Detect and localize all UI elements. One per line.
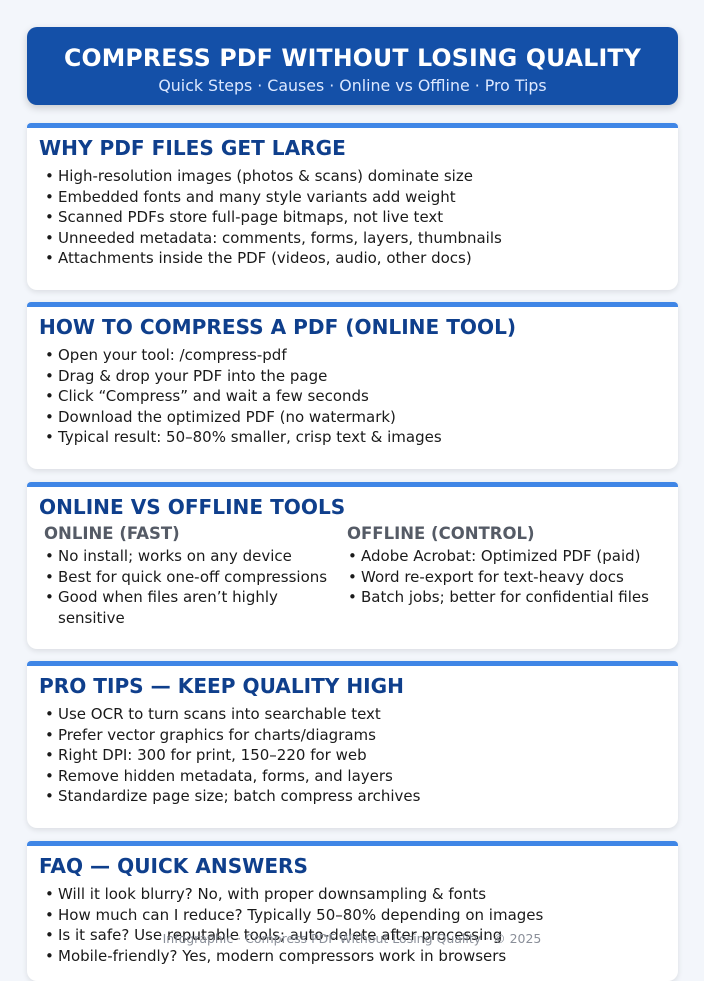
bullet list: Typical result: 50–80% smaller, crisp text & images: [58, 428, 442, 446]
bullet list: Download the optimized PDF (no watermark): [58, 408, 396, 426]
column: offline: Batch jobs; better for confidential files: [361, 588, 649, 606]
panel: faq: [27, 841, 678, 981]
column: online: No install; works on any device: [58, 547, 292, 565]
column: offline: [347, 524, 649, 606]
panel: how to compress: [27, 302, 678, 469]
bullet list: How much can I reduce? Typically 50–80% depending on images: [58, 906, 543, 924]
two columns: [44, 524, 649, 627]
column: offline: OFFLINE (CONTROL): [347, 524, 535, 543]
bullet list: High-resolution images (photos & scans) dominate size: [58, 167, 473, 185]
heading: ONLINE VS OFFLINE TOOLS: [39, 495, 345, 519]
bullet list: Mobile-friendly? Yes, modern compressors work in browsers: [58, 947, 506, 965]
panel: why pdf files get large: [27, 123, 678, 290]
bullet list: Open your tool: /compress-pdf: [58, 346, 287, 364]
title: COMPRESS PDF WITHOUT LOSING QUALITY: [64, 44, 641, 72]
heading: HOW TO COMPRESS A PDF (ONLINE TOOL): [39, 315, 516, 339]
column: online: Good when files aren’t highly sensitive: [58, 588, 278, 627]
subtitle: Quick Steps · Causes · Online vs Offline · Pro Tips: [158, 76, 547, 95]
bullet list: [47, 346, 442, 446]
bullet list: Attachments inside the PDF (videos, audio, other docs): [58, 249, 472, 267]
column: offline: Word re-export for text-heavy docs: [361, 568, 624, 586]
column: online: Best for quick one-off compressions: [58, 568, 327, 586]
bullet list: Embedded fonts and many style variants add weight: [58, 188, 456, 206]
bullet list: Scanned PDFs store full-page bitmaps, not live text: [58, 208, 443, 226]
header: [27, 27, 678, 105]
heading: WHY PDF FILES GET LARGE: [39, 136, 346, 160]
heading: PRO TIPS — KEEP QUALITY HIGH: [39, 674, 404, 698]
bullet list: Unneeded metadata: comments, forms, layers, thumbnails: [58, 229, 502, 247]
column: offline: Adobe Acrobat: Optimized PDF (paid): [361, 547, 641, 565]
heading: FAQ — QUICK ANSWERS: [39, 854, 308, 878]
bullet list: Remove hidden metadata, forms, and layers: [58, 767, 393, 785]
bullet list: Prefer vector graphics for charts/diagrams: [58, 726, 376, 744]
footer: Infographic · Compress PDF Without Losing Quality · © 2025: [163, 931, 541, 946]
panel: pro tips: [27, 661, 678, 828]
bullet list: Standardize page size; batch compress archives: [58, 787, 420, 805]
bullet list: Right DPI: 300 for print, 150–220 for web: [58, 746, 367, 764]
bullet list: Will it look blurry? No, with proper downsampling & fonts: [58, 885, 486, 903]
bullet list: [47, 705, 420, 805]
bullet list: Is it safe? Use reputable tools; auto-delete after processing: [58, 926, 502, 944]
column: online: [44, 524, 327, 627]
panel: online vs offline: [27, 482, 678, 649]
bullet list: Click “Compress” and wait a few seconds: [58, 387, 369, 405]
bullet list: [47, 885, 543, 965]
column: online: ONLINE (FAST): [44, 524, 180, 543]
bullet list: Drag & drop your PDF into the page: [58, 367, 327, 385]
bullet list: [47, 167, 502, 267]
bullet list: Use OCR to turn scans into searchable text: [58, 705, 381, 723]
